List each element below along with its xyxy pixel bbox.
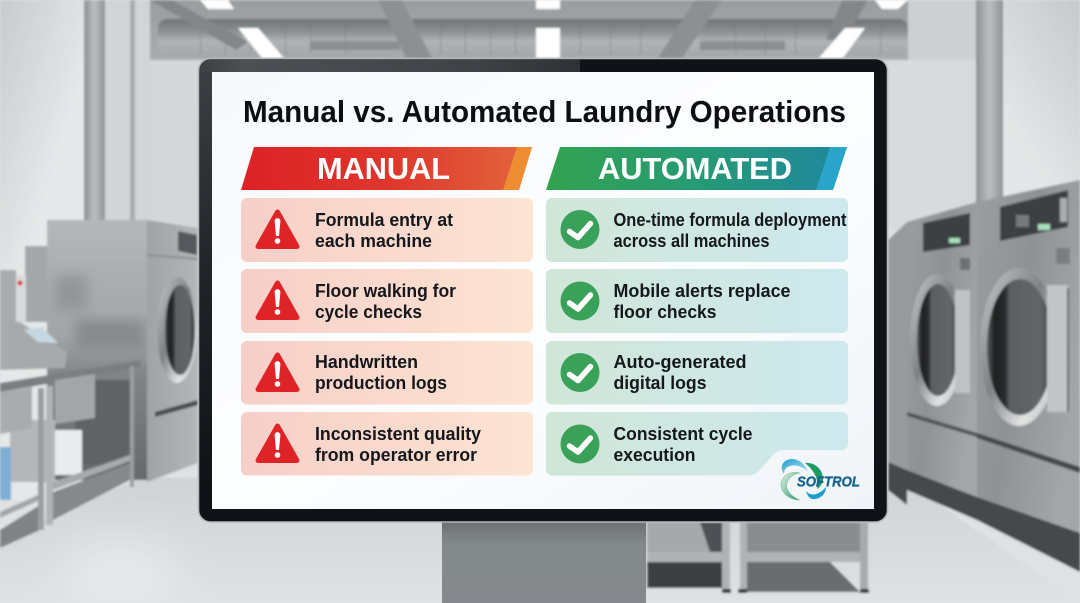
icon: check circle: [560, 353, 600, 392]
manual row 4: [241, 412, 533, 476]
text: inconsistent quality: from operator error: [315, 444, 477, 465]
manual row 1: [241, 198, 533, 262]
panel: manual column: [241, 147, 533, 476]
manual row 2: [241, 269, 533, 333]
text: floor walking: Floor walking for: [315, 280, 456, 301]
automated row 3: [546, 341, 848, 404]
manual banner: MANUAL: [317, 151, 450, 186]
text: formula entry: [315, 209, 453, 251]
text: formula entry: each machine: [315, 230, 432, 251]
logo: Softrol: SOFTROL: [797, 474, 860, 490]
icon: warning triangle: [258, 426, 297, 460]
text: floor walking: cycle checks: [315, 301, 422, 322]
text: consistent cycle: Consistent cycle: [614, 423, 752, 444]
monitor: [198, 58, 888, 522]
icon: warning triangle: [258, 283, 297, 318]
panel: automated column: [546, 147, 848, 476]
monitor stand: [442, 520, 646, 603]
text: formula entry: Formula entry at: [315, 209, 453, 230]
automated banner: AUTOMATED: [598, 151, 792, 186]
icon: check circle: [560, 282, 600, 320]
text: mobile alerts: [614, 280, 790, 322]
screen: [212, 72, 874, 509]
text: floor walking: [315, 280, 456, 322]
text: mobile alerts: Mobile alerts replace: [614, 280, 790, 301]
text: handwritten logs: [315, 351, 447, 393]
text: digital logs: digital logs: [614, 372, 706, 393]
text: inconsistent quality: [315, 423, 482, 465]
text: one-time deployment: [614, 209, 846, 251]
text: handwritten logs: production logs: [315, 372, 447, 393]
text: digital logs: Auto-generated: [614, 351, 746, 372]
automated row 1: [546, 198, 848, 262]
text: mobile alerts: floor checks: [614, 301, 716, 322]
automated banner: [546, 147, 847, 190]
title: Manual vs. Automated Laundry Operations: [243, 94, 846, 129]
text: one-time deployment: across all machines: [614, 230, 770, 251]
text: one-time deployment: One-time formula deployment: [614, 209, 846, 230]
automated row 4: [546, 412, 848, 476]
text: inconsistent quality: Inconsistent quality: [315, 423, 482, 444]
text: handwritten logs: Handwritten: [315, 351, 418, 372]
icon: check circle: [560, 424, 600, 464]
text: consistent cycle: [614, 423, 752, 465]
text: consistent cycle: execution: [614, 444, 696, 465]
icon: warning triangle: [258, 212, 297, 246]
manual banner: [241, 147, 532, 190]
icon: warning triangle: [258, 355, 297, 390]
icon: check circle: [560, 210, 600, 249]
text: digital logs: [614, 351, 746, 393]
logo: Softrol: [781, 459, 860, 500]
manual row 3: [241, 341, 533, 404]
automated row 2: [546, 269, 848, 333]
